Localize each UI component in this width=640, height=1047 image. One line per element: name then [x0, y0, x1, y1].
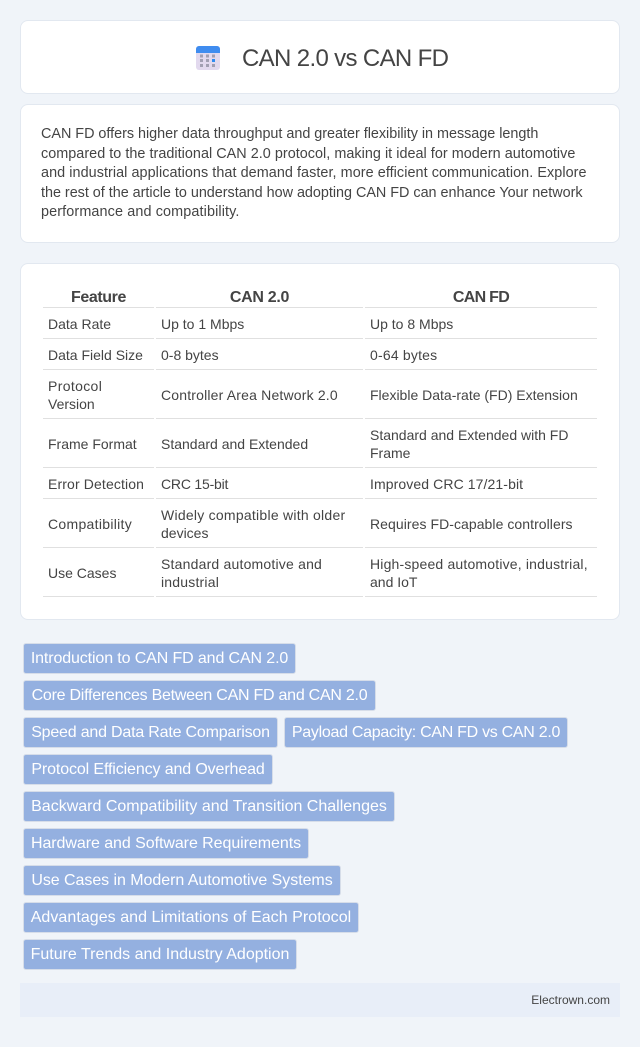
table header: CAN 2.0 — [230, 289, 289, 306]
row: data field size: Data Field Size — [48, 347, 143, 363]
row: protocol version: Protocol — [48, 378, 102, 394]
footer credit: Electrown.com — [531, 993, 610, 1007]
title: CAN 2.0 vs CAN FD — [242, 45, 448, 72]
table header — [71, 289, 510, 306]
row: use cases: Use Cases — [48, 565, 116, 581]
tag — [23, 717, 278, 748]
table header: CAN FD — [453, 289, 509, 306]
intro text: performance and compatibility. — [41, 204, 240, 220]
row: protocol version — [48, 378, 578, 412]
row: use cases — [48, 556, 588, 590]
row: error detection: Error Detection — [48, 476, 144, 492]
row: data field size — [48, 347, 437, 363]
icon: calendar — [196, 46, 220, 70]
row: frame format: Frame Format — [48, 436, 137, 452]
row: frame format: Frame — [370, 445, 410, 461]
intro text: and industrial applications that demand faster, more efficient communication. Explore — [41, 165, 587, 181]
row: use cases: High-speed automotive, industrial, — [370, 556, 588, 572]
tag: Use Cases in Modern Automotive Systems — [31, 872, 333, 889]
tag: Advantages and Limitations of Each Protocol — [31, 909, 351, 926]
row: compatibility: Widely compatible with older — [161, 507, 345, 523]
row: data rate: Up to 8 Mbps — [370, 316, 453, 332]
row: use cases: industrial — [161, 574, 219, 590]
panel: introduction — [20, 104, 620, 243]
tag: Future Trends and Industry Adoption — [31, 946, 289, 963]
row: use cases: and IoT — [370, 574, 417, 590]
row: compatibility: Compatibility — [48, 516, 132, 532]
tag — [23, 865, 341, 896]
tag: Backward Compatibility and Transition Challenges — [31, 798, 387, 815]
row: data rate: Up to 1 Mbps — [161, 316, 244, 332]
tag — [23, 754, 273, 785]
tag: Core Differences Between CAN FD and CAN 2.0 — [32, 687, 367, 704]
intro text: CAN FD offers higher data throughput and greater flexibility in message length — [41, 126, 538, 142]
tag — [284, 717, 568, 748]
tag — [23, 791, 395, 822]
row: data field size: 0-8 bytes — [161, 347, 219, 363]
row: protocol version: Flexible Data-rate (FD) Extension — [370, 387, 578, 403]
row: error detection: CRC 15-bit — [161, 476, 228, 492]
tag: Introduction to CAN FD and CAN 2.0 — [31, 650, 288, 667]
panel: comparison table — [20, 263, 620, 620]
row: compatibility: Requires FD-capable controllers — [370, 516, 573, 532]
row: protocol version: Version — [48, 396, 95, 412]
topic tags — [23, 643, 568, 970]
intro text: the rest of the article to understand how adopting CAN FD can enhance Your network — [41, 184, 583, 200]
intro text — [41, 126, 587, 220]
footer — [20, 983, 620, 1017]
tag — [23, 680, 376, 711]
panel: header — [20, 20, 620, 94]
tag: Hardware and Software Requirements — [31, 835, 301, 852]
table header: Feature — [71, 289, 126, 306]
row: frame format: Standard and Extended — [161, 436, 308, 452]
row: data field size: 0-64 bytes — [370, 347, 437, 363]
row: compatibility — [48, 507, 573, 541]
row: use cases: Standard automotive and — [161, 556, 322, 572]
row: frame format: Standard and Extended with FD — [370, 427, 568, 443]
row: protocol version: Controller Area Network 2.0 — [161, 387, 338, 403]
row: frame format — [48, 427, 568, 461]
tag: Speed and Data Rate Comparison — [31, 724, 270, 741]
row: data rate — [48, 316, 453, 332]
tag — [23, 902, 359, 933]
tag — [23, 643, 296, 674]
row: error detection: Improved CRC 17/21-bit — [370, 476, 523, 492]
row: compatibility: devices — [161, 525, 208, 541]
tag — [23, 939, 297, 970]
tag: Payload Capacity: CAN FD vs CAN 2.0 — [292, 724, 560, 741]
tag: Protocol Efficiency and Overhead — [31, 761, 265, 778]
intro text: compared to the traditional CAN 2.0 protocol, making it ideal for modern automotive — [41, 146, 575, 162]
row: data rate: Data Rate — [48, 316, 111, 332]
tag — [23, 828, 309, 859]
row: error detection — [48, 476, 523, 492]
